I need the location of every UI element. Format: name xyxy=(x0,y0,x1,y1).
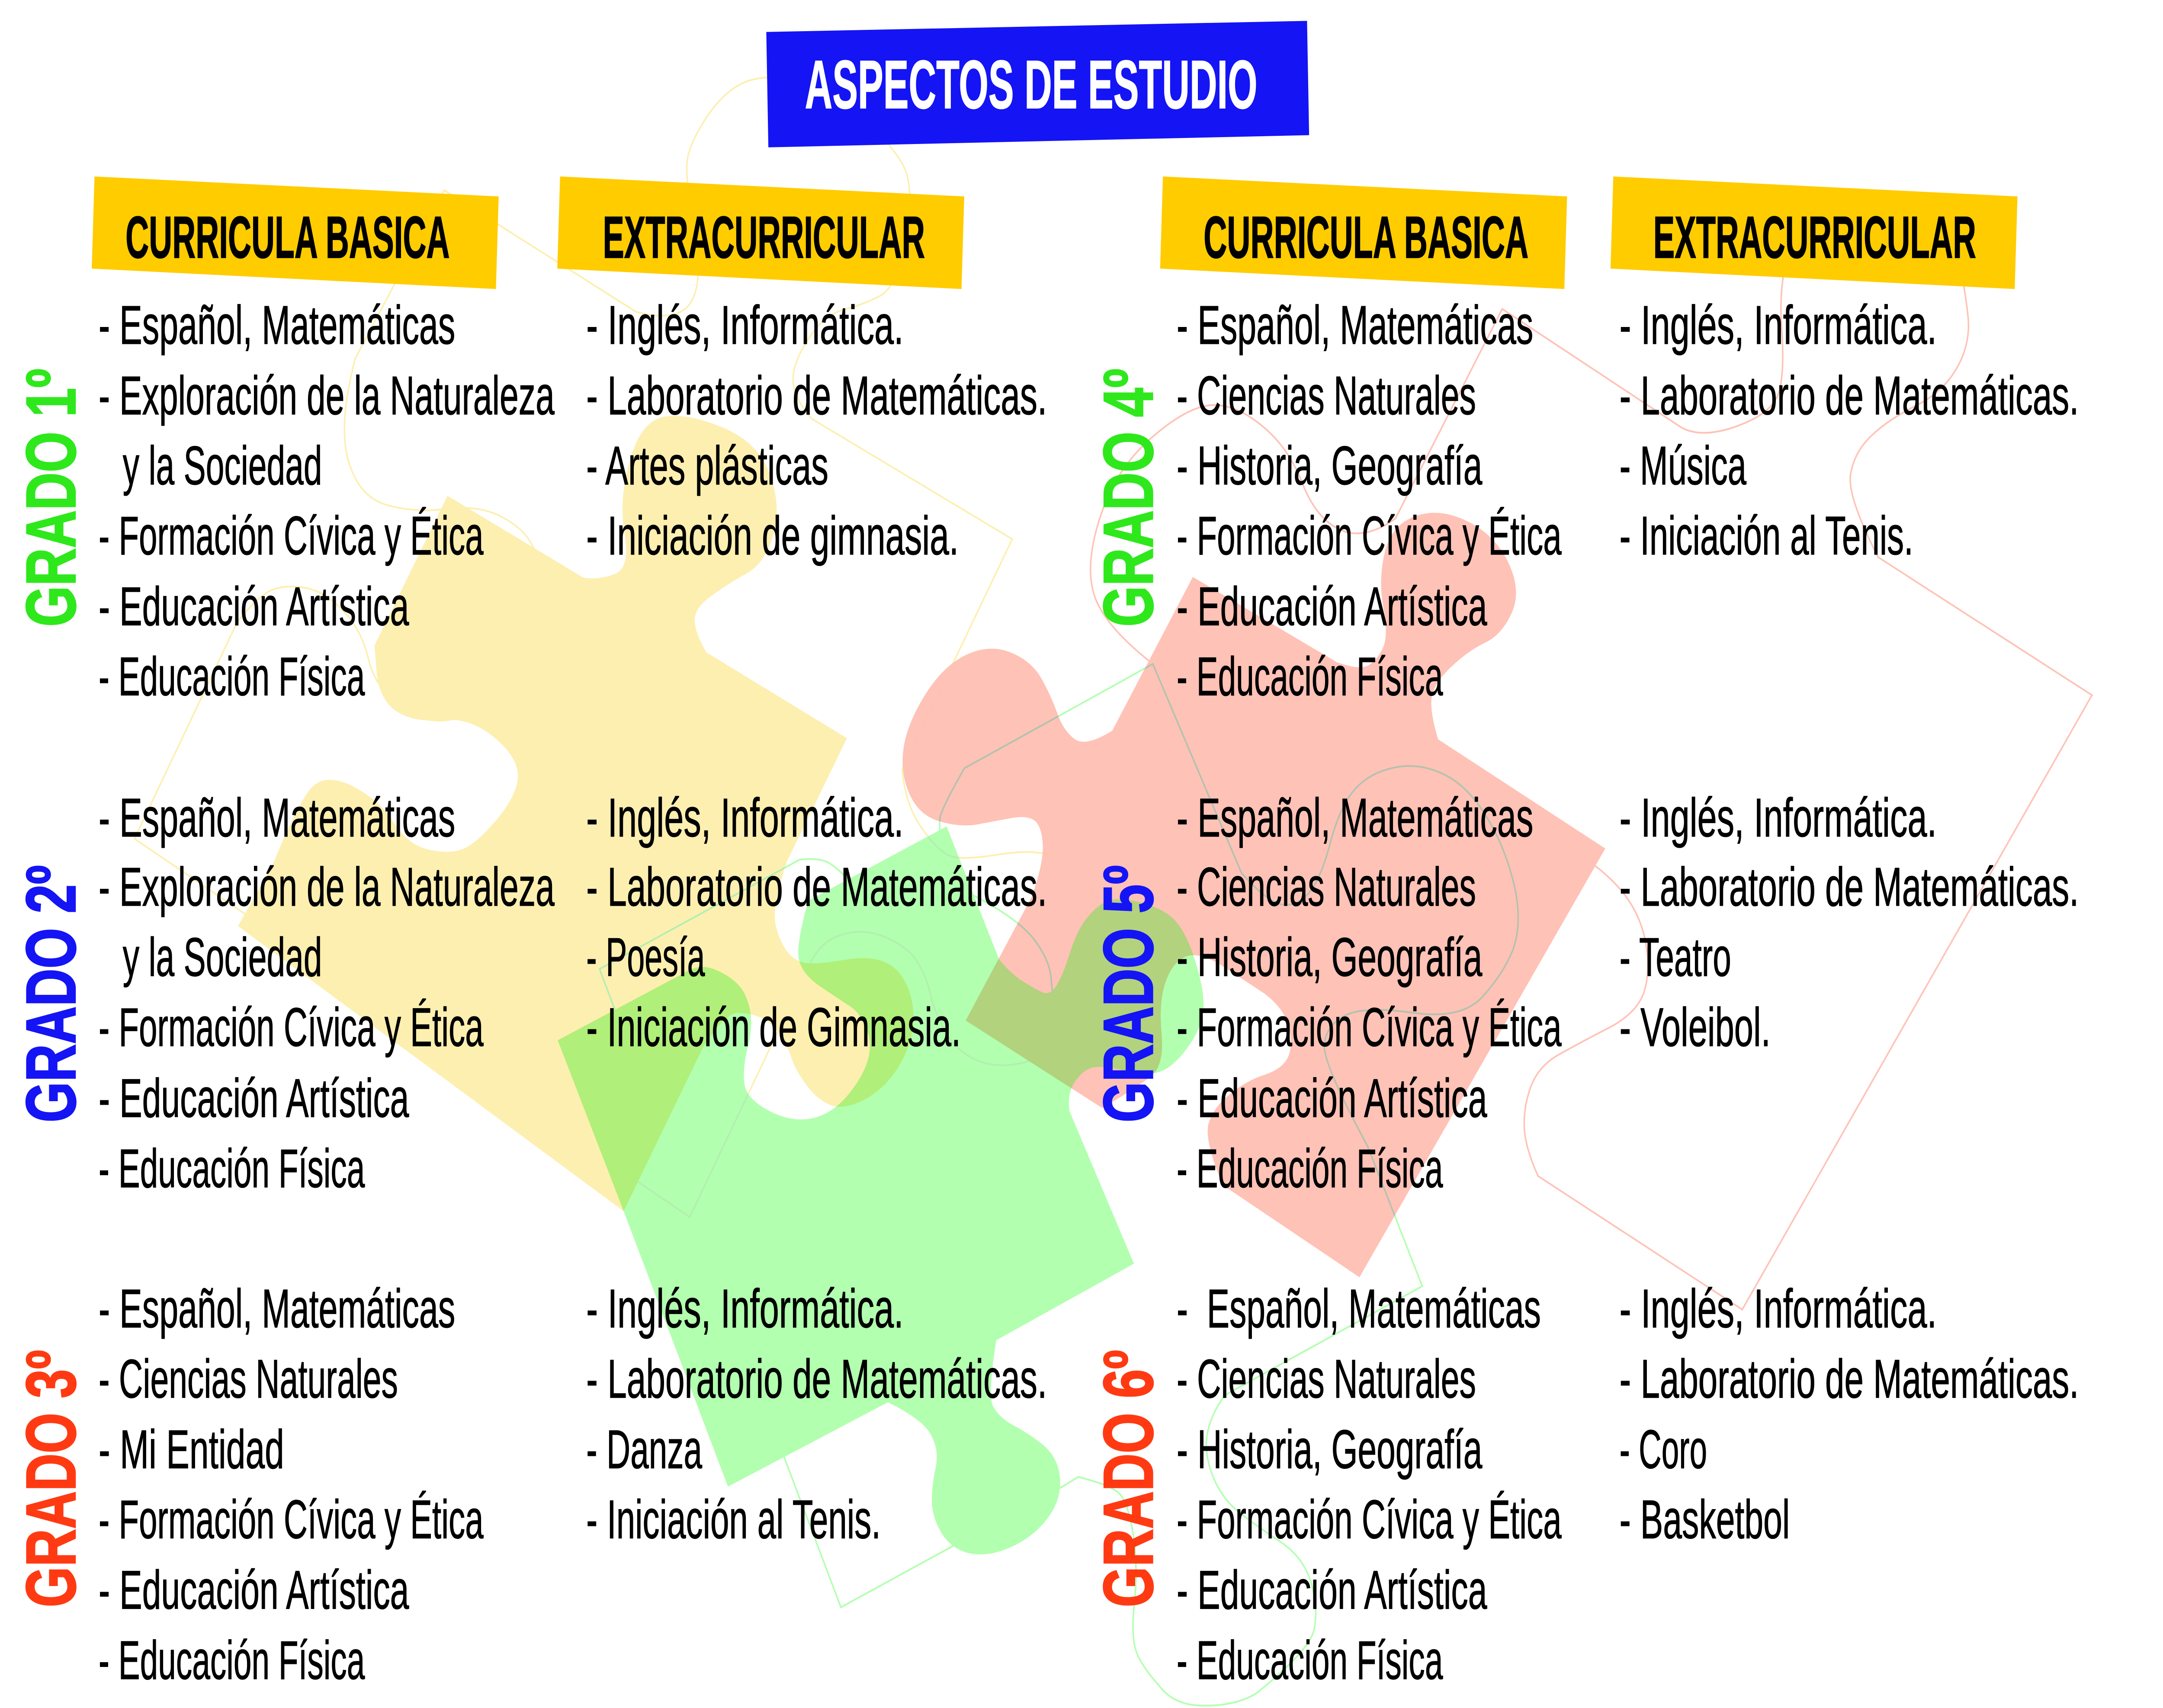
list: grado 3 extracurricular xyxy=(586,1279,1047,1550)
puzzle piece: yellow fill xyxy=(238,416,914,1211)
list: grado 5 extracurricular xyxy=(1620,787,2079,1058)
list: grado 2 curricula basica xyxy=(99,787,555,1199)
heading: curricula basica left xyxy=(92,176,499,289)
list: grado 6 curricula basica: - Historia, Geografía xyxy=(1177,1419,1483,1480)
list: grado 6 extracurricular: - Coro xyxy=(1620,1419,1707,1480)
list: grado 5 curricula basica: - Educación Física xyxy=(1177,1138,1443,1199)
list: grado 2 curricula basica: - Formación Cívica y Ética xyxy=(99,997,484,1058)
list: grado 1 extracurricular: - Inglés, Informática. xyxy=(586,295,904,356)
list: grado 2 extracurricular: - Poesía xyxy=(586,927,705,988)
heading: extracurricular left xyxy=(557,176,964,289)
list: grado 2 curricula basica: - Educación Física xyxy=(99,1138,365,1199)
list: grado 4 extracurricular: - Inglés, Informática. xyxy=(1620,295,1937,356)
list: grado 3 curricula basica xyxy=(99,1279,484,1691)
list: grado 4 curricula basica: - Español, Matemáticas xyxy=(1177,295,1533,356)
list: grado 4 curricula basica xyxy=(1177,295,1562,707)
label: grado 3: GRADO 3º xyxy=(12,1350,90,1607)
heading: extracurricular left: EXTRACURRICULAR xyxy=(603,205,925,270)
list: grado 4 curricula basica: - Historia, Geografía xyxy=(1177,436,1483,496)
label: grado 6: GRADO 6º xyxy=(1089,1350,1168,1607)
list: grado 3 curricula basica: - Ciencias Naturales xyxy=(99,1349,398,1410)
list: grado 2 curricula basica: - Exploración de la Naturaleza xyxy=(99,857,555,918)
list: grado 1 curricula basica: - Educación Artística xyxy=(99,576,409,637)
list: grado 2 extracurricular xyxy=(586,787,1047,1058)
list: grado 1 curricula basica: - Español, Matemáticas xyxy=(99,295,455,356)
label: grado 5: GRADO 5º xyxy=(1089,865,1168,1122)
list: grado 4 extracurricular xyxy=(1620,295,2079,567)
heading: curricula basica right: CURRICULA BASICA xyxy=(1203,205,1528,270)
heading: curricula basica left: CURRICULA BASICA xyxy=(125,205,450,270)
list: grado 1 extracurricular: - Artes plásticas xyxy=(586,436,828,496)
list: grado 2 extracurricular: - Laboratorio de Matemáticas. xyxy=(586,857,1047,918)
list: grado 4 curricula basica: - Ciencias Naturales xyxy=(1177,365,1476,426)
list: grado 1 curricula basica: - Formación Cívica y Ética xyxy=(99,506,484,567)
label: grado 4: GRADO 4º xyxy=(1089,369,1168,627)
list: grado 3 curricula basica: - Español, Matemáticas xyxy=(99,1279,455,1339)
list: grado 4 curricula basica: - Formación Cívica y Ética xyxy=(1177,506,1562,567)
list: grado 3 extracurricular: - Iniciación al Tenis. xyxy=(586,1489,881,1550)
list: grado 6 curricula basica: - Español, Matemáticas xyxy=(1177,1279,1541,1339)
list: grado 3 curricula basica: - Mi Entidad xyxy=(99,1419,284,1480)
list: grado 1 curricula basica: y la Sociedad xyxy=(123,436,322,496)
list: grado 5 curricula basica: - Ciencias Naturales xyxy=(1177,857,1476,918)
list: grado 2 curricula basica: - Educación Artística xyxy=(99,1068,409,1129)
puzzle outline: red xyxy=(1091,211,2092,1310)
title banner xyxy=(766,21,1309,147)
list: grado 1 extracurricular: - Laboratorio de Matemáticas. xyxy=(586,365,1047,426)
puzzle outline: yellow xyxy=(135,76,1109,1217)
list: grado 6 extracurricular: - Inglés, Informática. xyxy=(1620,1279,1937,1339)
label: grado 1: GRADO 1º xyxy=(12,369,90,627)
list: grado 4 extracurricular: - Iniciación al Tenis. xyxy=(1620,506,1913,567)
list: grado 6 curricula basica xyxy=(1177,1279,1562,1691)
list: grado 1 extracurricular xyxy=(586,295,1047,567)
list: grado 6 extracurricular xyxy=(1620,1279,2079,1550)
list: grado 5 curricula basica xyxy=(1177,787,1562,1199)
heading: curricula basica right xyxy=(1160,176,1567,289)
list: grado 3 extracurricular: - Danza xyxy=(586,1419,703,1480)
list: grado 5 curricula basica: - Formación Cívica y Ética xyxy=(1177,997,1562,1058)
title banner: ASPECTOS DE ESTUDIO xyxy=(805,46,1258,123)
heading: extracurricular right xyxy=(1611,176,2018,289)
list: grado 5 extracurricular: - Inglés, Informática. xyxy=(1620,787,1937,848)
list: grado 5 curricula basica: - Español, Matemáticas xyxy=(1177,787,1533,848)
puzzle piece: red fill xyxy=(902,513,1605,1277)
list: grado 6 extracurricular: - Basketbol xyxy=(1620,1489,1790,1550)
list: grado 6 curricula basica: - Ciencias Naturales xyxy=(1177,1349,1476,1410)
list: grado 1 curricula basica xyxy=(99,295,555,707)
list: grado 5 curricula basica: - Educación Artística xyxy=(1177,1068,1487,1129)
list: grado 4 curricula basica: - Educación Física xyxy=(1177,646,1443,707)
puzzle outline: green xyxy=(600,664,1518,1706)
list: grado 4 curricula basica: - Educación Artística xyxy=(1177,576,1487,637)
overlap of green and red pieces xyxy=(966,899,1193,1088)
list: grado 4 extracurricular: - Música xyxy=(1620,436,1746,496)
list: grado 6 curricula basica: - Educación Artística xyxy=(1177,1560,1487,1621)
label: grado 2: GRADO 2º xyxy=(12,865,90,1122)
list: grado 5 extracurricular: - Teatro xyxy=(1620,927,1731,988)
list: grado 2 extracurricular: - Inglés, Informática. xyxy=(586,787,904,848)
list: grado 2 curricula basica: - Español, Matemáticas xyxy=(99,787,455,848)
list: grado 2 curricula basica: y la Sociedad xyxy=(123,927,322,988)
list: grado 1 curricula basica: - Exploración de la Naturaleza xyxy=(99,365,555,426)
list: grado 3 extracurricular: - Inglés, Informática. xyxy=(586,1279,904,1339)
list: grado 3 curricula basica: - Educación Física xyxy=(99,1630,365,1691)
list: grado 1 extracurricular: - Iniciación de gimnasia. xyxy=(586,506,959,567)
list: grado 2 extracurricular: - Iniciación de Gimnasia. xyxy=(586,997,961,1058)
list: grado 6 curricula basica: - Educación Física xyxy=(1177,1630,1443,1691)
list: grado 5 extracurricular: - Voleibol. xyxy=(1620,997,1771,1058)
list: grado 6 curricula basica: - Formación Cívica y Ética xyxy=(1177,1489,1562,1550)
list: grado 5 curricula basica: - Historia, Geografía xyxy=(1177,927,1483,988)
list: grado 3 extracurricular: - Laboratorio de Matemáticas. xyxy=(586,1349,1047,1410)
list: grado 1 curricula basica: - Educación Física xyxy=(99,646,365,707)
puzzle piece: green fill xyxy=(558,827,1203,1554)
list: grado 3 curricula basica: - Formación Cívica y Ética xyxy=(99,1489,484,1550)
list: grado 3 curricula basica: - Educación Artística xyxy=(99,1560,409,1621)
